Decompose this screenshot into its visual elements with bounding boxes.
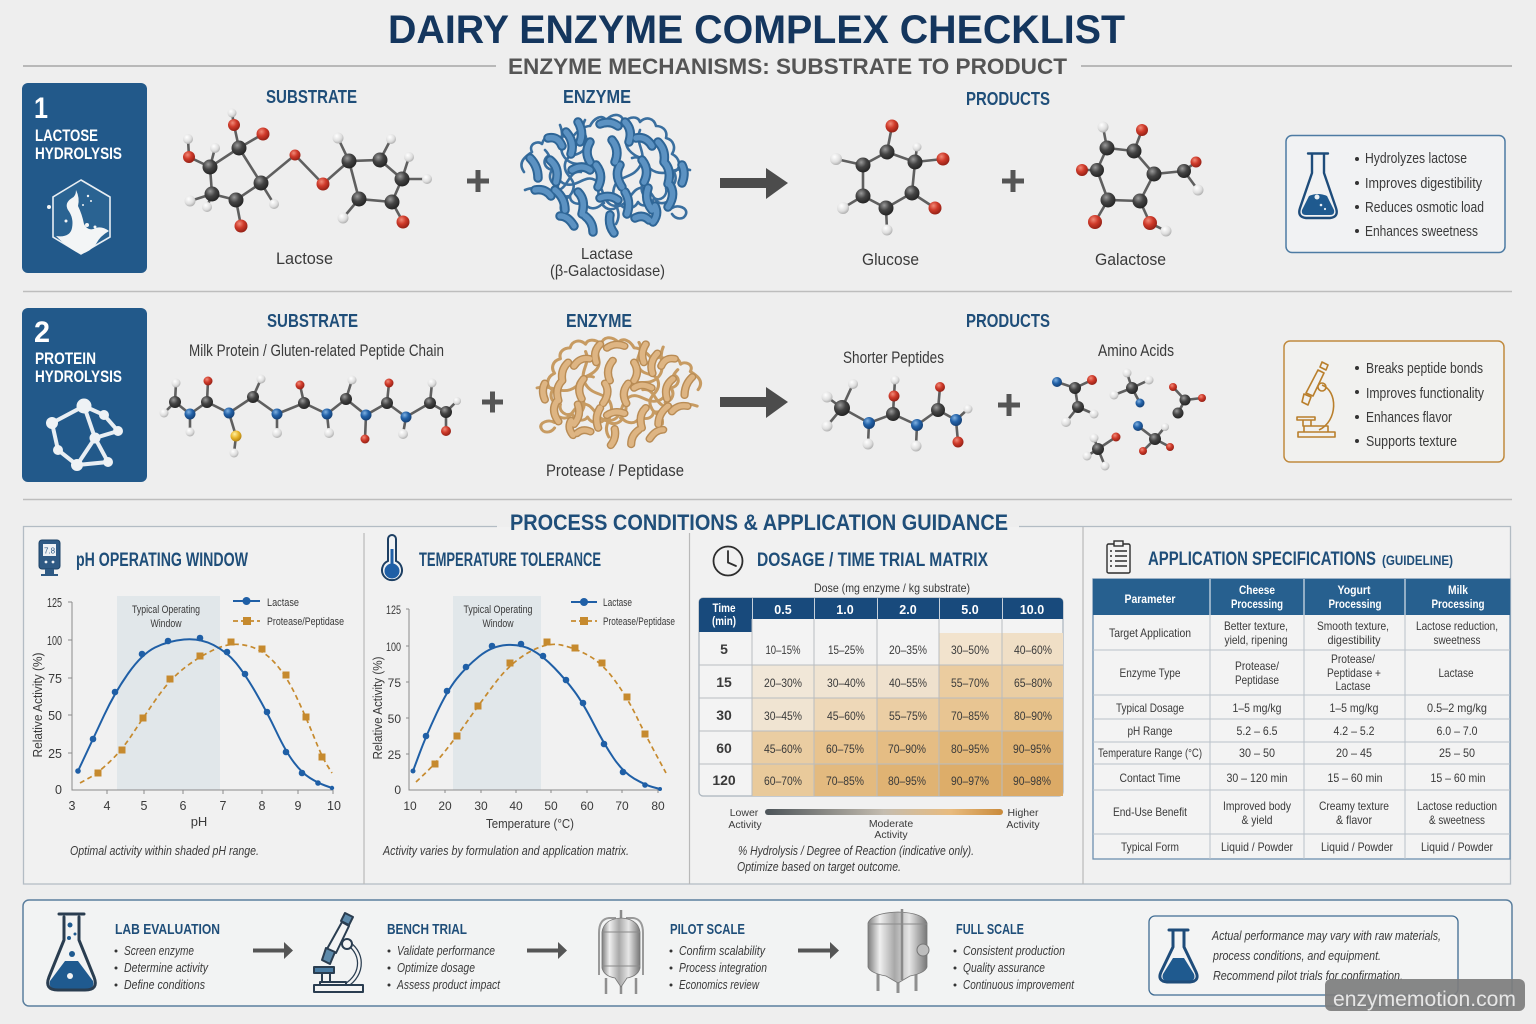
row: contact time: 15 – 60 min <box>1328 771 1382 785</box>
chart: pH activity <box>31 596 344 829</box>
icon: milk splash hexagon <box>47 180 110 254</box>
list: protease benefits: Breaks peptide bonds <box>1366 361 1483 377</box>
list: full scale: Quality assurance <box>963 961 1045 975</box>
header row: Milk <box>1448 583 1468 597</box>
badge: protein hydrolysis: PROTEIN <box>35 349 96 368</box>
panel frame: process conditions <box>24 526 1510 884</box>
legend: activity scale <box>728 807 1040 841</box>
chart: temperature activity <box>371 596 675 831</box>
label: enzyme: ENZYME <box>566 311 632 331</box>
row: enzyme type: Lactase <box>1438 666 1474 680</box>
header labels: 0.5 <box>774 603 792 617</box>
row: target application: yield, ripening <box>1224 633 1288 647</box>
row: 15 min: 20–30% <box>764 676 802 690</box>
heading: application specifications: (GUIDELINE) <box>1382 552 1453 568</box>
x axis labels: 80 <box>651 799 665 813</box>
step: pilot scale <box>599 910 767 994</box>
row: 60 min: 80–95% <box>951 742 989 756</box>
row: temperature range: Temperature Range (°C) <box>1098 746 1202 760</box>
label: galactose: Galactose <box>1095 250 1166 269</box>
header row: Yogurt <box>1338 583 1370 597</box>
arrow: bench to pilot <box>527 942 567 959</box>
row: 120 min: 90–97% <box>951 774 989 788</box>
x axis labels: 10 <box>327 799 341 813</box>
label: shorter peptides: Shorter Peptides <box>843 348 944 367</box>
shaded operating window <box>117 596 220 790</box>
heat cells <box>752 633 1063 796</box>
row: 120 min: 80–95% <box>888 774 926 788</box>
label: typical window: Typical Operating <box>132 604 200 616</box>
list: pilot scale: Confirm scalability <box>679 944 766 958</box>
icon: thermometer <box>382 535 402 580</box>
icon: clipboard <box>1107 541 1130 573</box>
series: protease <box>416 638 666 782</box>
icon: microscope outline <box>1297 362 1335 437</box>
list: lactase benefits: Hydrolyzes lactose <box>1365 151 1467 167</box>
row: 15 min: 15 <box>716 674 732 690</box>
molecule: shorter peptides <box>822 376 972 452</box>
label: glucose: Glucose <box>862 250 919 269</box>
y axis labels: 100 <box>386 640 401 654</box>
label: typical window: Typical Operating <box>464 604 532 616</box>
watermark <box>1325 979 1525 1011</box>
y axis labels: 50 <box>48 709 62 723</box>
row: typical dosage: 1–5 mg/kg <box>1330 701 1378 715</box>
row: 30 min: 45–60% <box>827 709 865 723</box>
text: disclaimer: Actual performance may vary with raw materials, <box>1211 928 1441 943</box>
title: DAIRY ENZYME COMPLEX CHECKLIST <box>388 8 1125 52</box>
row: 15 min: 30–40% <box>827 676 865 690</box>
row: target application <box>1109 619 1498 647</box>
row: temperature range: 30 – 50 <box>1239 746 1275 760</box>
row: typical form: Typical Form <box>1121 840 1179 854</box>
step: lab evaluation <box>48 914 220 992</box>
panel: dosage time matrix <box>699 546 1063 874</box>
icon: molecule network <box>46 398 123 471</box>
badge: protein hydrolysis: 2 <box>34 316 50 349</box>
axis title: pH: pH <box>191 814 207 829</box>
row: enzyme type: Protease/ <box>1331 652 1376 666</box>
row: 120 min <box>712 772 1051 788</box>
y axis labels <box>386 603 401 797</box>
row: 120 min: 120 <box>712 772 736 788</box>
label: lactase: (β-Galactosidase) <box>550 263 665 280</box>
series: lactase <box>410 641 662 791</box>
header row: Cheese <box>1239 583 1275 597</box>
list: pilot scale: Economics review <box>679 978 760 992</box>
row: target application: sweetness <box>1434 633 1480 647</box>
x axis labels: 20 <box>438 799 452 813</box>
row: end-use benefit: End-Use Benefit <box>1113 805 1188 819</box>
row: contact time: 15 – 60 min <box>1430 771 1486 785</box>
y axis labels: 25 <box>388 748 401 762</box>
row: end-use benefit: & sweetness <box>1429 813 1485 827</box>
table: dosage matrix <box>699 598 1063 796</box>
icon: flask <box>1299 154 1337 218</box>
x axis labels: 6 <box>180 799 187 813</box>
arrow: reaction <box>720 168 788 199</box>
header labels: 5.0 <box>961 603 979 617</box>
row: 5 min: 30–50% <box>951 643 989 657</box>
list: full scale: Continuous improvement <box>963 978 1074 992</box>
row: 30 min: 30 <box>716 707 732 723</box>
row: enzyme type: Peptidase <box>1235 673 1279 687</box>
legend: activity scale: Activity <box>874 829 908 841</box>
legend: Protease/Peptidase <box>267 616 344 628</box>
row: typical dosage: 1–5 mg/kg <box>1232 701 1282 715</box>
note: dosage <box>737 844 974 874</box>
y axis labels: 125 <box>47 596 62 610</box>
header labels: 10.0 <box>1020 603 1044 617</box>
badge: protein hydrolysis <box>22 308 147 482</box>
icon: pH meter <box>39 540 60 576</box>
row: 120 min: 60–70% <box>764 774 802 788</box>
row: 60 min: 60 <box>716 740 732 756</box>
row: 60 min: 45–60% <box>764 742 802 756</box>
row: target application: digestibility <box>1328 633 1380 647</box>
header row: Processing <box>1231 597 1283 611</box>
header cells <box>699 598 1063 632</box>
axis title: temperature: Temperature (°C) <box>486 816 574 831</box>
list: lab evaluation: Define conditions <box>124 978 205 992</box>
row: target application: Target Application <box>1109 626 1191 640</box>
badge: lactose hydrolysis: LACTOSE <box>35 126 98 145</box>
label: lactase <box>550 246 665 280</box>
legend: activity scale: Activity <box>1006 819 1040 831</box>
molecule: peptide chain <box>160 374 461 458</box>
list: pilot scale: Process integration <box>679 961 767 975</box>
row: target application: Better texture, <box>1224 619 1288 633</box>
row: 15 min: 55–70% <box>951 676 989 690</box>
axes <box>68 602 333 794</box>
row: end-use benefit <box>1113 799 1497 827</box>
x axis labels: 4 <box>104 799 111 813</box>
icon: pH meter: 7.8 <box>44 546 56 556</box>
label: products: PRODUCTS <box>966 89 1050 109</box>
list: protease benefits <box>1355 361 1485 450</box>
plus sign <box>1002 170 1024 192</box>
panel: protein hydrolysis <box>22 308 1504 482</box>
row: target application: Smooth texture, <box>1317 619 1389 633</box>
label: typical window <box>132 604 200 630</box>
list: bench trial: Optimize dosage <box>397 961 475 975</box>
row: 60 min: 60–75% <box>826 742 864 756</box>
row: 15 min: 65–80% <box>1014 676 1052 690</box>
label: typical window <box>464 604 532 630</box>
list: bench trial: Assess product impact <box>396 978 500 992</box>
y axis labels: 125 <box>386 603 401 617</box>
heading: temperature: TEMPERATURE TOLERANCE <box>419 550 601 571</box>
legend: activity scale: Moderate <box>869 818 913 830</box>
header row: Processing <box>1432 597 1484 611</box>
legend: Protease/Peptidase <box>603 616 675 628</box>
row: typical dosage <box>1116 701 1487 715</box>
icon: flask <box>1160 930 1197 982</box>
row: 15 min <box>716 674 1052 690</box>
row: 120 min: 90–98% <box>1013 774 1051 788</box>
molecules: amino acids <box>1052 368 1206 470</box>
panel: application specifications <box>1093 541 1510 859</box>
subtitle: enzyme mechanisms: ENZYME MECHANISMS: SUBSTRATE TO PRODUCT <box>508 54 1068 79</box>
header labels <box>712 601 1044 628</box>
list: bench trial: Validate performance <box>397 944 495 958</box>
row: 5 min: 5 <box>720 641 728 657</box>
x axis labels <box>403 799 665 813</box>
badge: lactose hydrolysis: HYDROLYSIS <box>35 144 122 163</box>
row: typical dosage: 0.5–2 mg/kg <box>1427 701 1487 715</box>
note: dosage: % Hydrolysis / Degree of Reaction (indicative only). <box>738 844 974 858</box>
row: 15 min: 40–55% <box>889 676 927 690</box>
icon: flask <box>48 914 95 990</box>
y axis labels: 0 <box>55 783 62 797</box>
heading: process conditions: PROCESS CONDITIONS & APPLICATION GUIDANCE <box>510 510 1008 535</box>
x axis labels: 7 <box>220 799 227 813</box>
note: temperature: Activity varies by formulation and application matrix. <box>382 844 629 858</box>
list: protease benefits: Improves functionality <box>1366 386 1485 402</box>
legend: Lactase <box>267 597 299 609</box>
series: protease <box>80 638 332 783</box>
y axis labels: 100 <box>47 634 62 648</box>
watermark: enzymemotion.com <box>1333 988 1516 1011</box>
y axis labels <box>47 596 62 797</box>
x axis labels: 9 <box>295 799 302 813</box>
label: amino acids: Amino Acids <box>1098 341 1174 360</box>
label: substrate name: Milk Protein / Gluten-related Peptide Chain <box>189 341 444 360</box>
label: products: PRODUCTS <box>966 311 1050 331</box>
row: target application: Lactose reduction, <box>1416 619 1498 633</box>
row: 5 min <box>720 641 1052 657</box>
list: full scale <box>954 944 1074 992</box>
legend: activity scale: Higher <box>1008 807 1039 819</box>
row: temperature range: 25 – 50 <box>1439 746 1475 760</box>
row: end-use benefit: & yield <box>1242 813 1272 827</box>
table: application specifications <box>1093 579 1510 859</box>
row: end-use benefit: & flavor <box>1336 813 1372 827</box>
row: enzyme type <box>1120 652 1474 693</box>
plus sign <box>467 170 489 192</box>
enzyme: lactase ribbon structure <box>521 115 690 233</box>
list: lactase benefits: Improves digestibility <box>1365 176 1483 192</box>
row: pH range: 6.0 – 7.0 <box>1436 724 1478 738</box>
arrow: lab to bench <box>253 942 293 959</box>
row: 60 min: 70–90% <box>888 742 926 756</box>
row: 120 min: 70–85% <box>826 774 864 788</box>
heading: full scale: FULL SCALE <box>956 921 1024 938</box>
heading: lab evaluation: LAB EVALUATION <box>115 921 220 938</box>
row: enzyme type: Enzyme Type <box>1120 666 1181 680</box>
list: protease benefits: Enhances flavor <box>1366 410 1452 426</box>
y axis labels: 75 <box>48 672 62 686</box>
x axis labels: 60 <box>580 799 594 813</box>
label: protease: Protease / Peptidase <box>546 461 684 480</box>
molecule: lactose <box>183 108 432 232</box>
row: enzyme type: Protease/ <box>1235 659 1280 673</box>
x axis labels: 30 <box>474 799 488 813</box>
row: 30 min: 80–90% <box>1014 709 1052 723</box>
x axis labels: 50 <box>544 799 558 813</box>
row: end-use benefit: Lactose reduction <box>1417 799 1497 813</box>
note: dosage: Optimize based on target outcome. <box>737 860 901 874</box>
row: 30 min: 30–45% <box>764 709 802 723</box>
plus sign <box>482 392 503 412</box>
row: typical form: Liquid / Powder <box>1321 840 1393 854</box>
row: 5 min: 15–25% <box>828 643 864 657</box>
row: temperature range <box>1098 746 1475 760</box>
list: lab evaluation: Determine activity <box>124 961 209 975</box>
y axis labels: 50 <box>388 712 401 726</box>
row: 5 min: 40–60% <box>1014 643 1052 657</box>
panel: scale-up pathway <box>23 900 1512 1006</box>
header labels: (min) <box>712 614 736 628</box>
icon: pilot vessel <box>599 910 643 994</box>
label: substrate: SUBSTRATE <box>266 87 357 107</box>
enzyme: protease ribbon structure <box>537 338 701 445</box>
heading: bench trial: BENCH TRIAL <box>387 921 467 938</box>
x axis labels: 3 <box>69 799 76 813</box>
label: lactase: Lactase <box>581 246 633 263</box>
x axis labels: 10 <box>403 799 417 813</box>
axis title: relative activity: Relative Activity (%) <box>371 656 385 760</box>
shaded operating window <box>453 596 541 790</box>
text: disclaimer <box>1211 928 1441 983</box>
legend: Lactase <box>603 597 632 609</box>
row: 30 min: 55–75% <box>889 709 927 723</box>
row: pH range: 4.2 – 5.2 <box>1334 724 1375 738</box>
text: disclaimer: Recommend pilot trials for confirmation. <box>1213 968 1403 983</box>
panel: lactose hydrolysis <box>22 83 1505 280</box>
icon: clock <box>714 546 742 576</box>
header labels: 2.0 <box>899 603 917 617</box>
header row: Parameter <box>1124 592 1176 606</box>
label: typical window: Window <box>482 618 514 630</box>
list: lactase benefits: Reduces osmotic load <box>1365 200 1484 216</box>
axes <box>406 609 661 793</box>
header row <box>1093 579 1510 615</box>
x axis labels: 40 <box>509 799 523 813</box>
heading: application specifications: APPLICATION SPECIFICATIONS <box>1148 549 1376 570</box>
row: typical form: Liquid / Powder <box>1221 840 1293 854</box>
row: end-use benefit: Improved body <box>1223 799 1291 813</box>
row: typical form: Liquid / Powder <box>1421 840 1493 854</box>
series: lactase <box>75 635 334 790</box>
list: protease benefits: Supports texture <box>1366 434 1457 450</box>
x axis labels: 8 <box>259 799 266 813</box>
icon: production tank <box>868 909 929 993</box>
molecule: galactose <box>1076 122 1204 236</box>
step: bench trial <box>314 913 500 992</box>
label: enzyme: ENZYME <box>563 87 631 107</box>
plus sign <box>998 394 1020 416</box>
heading: pilot scale: PILOT SCALE <box>670 921 745 938</box>
panel: pH operating window <box>31 540 344 858</box>
row: enzyme type: Peptidase + <box>1327 666 1381 680</box>
row: typical dosage: Typical Dosage <box>1116 701 1184 715</box>
label: lactose: Lactose <box>276 249 333 268</box>
row: 5 min: 20–35% <box>889 643 927 657</box>
arrow: pilot to full <box>798 942 839 959</box>
badge: lactose hydrolysis <box>22 83 147 273</box>
row: 5 min: 10–15% <box>766 643 801 657</box>
text: disclaimer: process conditions, and equipment. <box>1212 948 1381 963</box>
row: end-use benefit: Creamy texture <box>1319 799 1389 813</box>
callout: protease benefits <box>1284 341 1504 462</box>
label: typical window: Window <box>150 618 182 630</box>
callout: lactase benefits <box>1286 136 1505 252</box>
axis title: relative activity: Relative Activity (%) <box>31 652 45 758</box>
x axis labels: 70 <box>615 799 629 813</box>
list: lab evaluation: Screen enzyme <box>124 944 194 958</box>
note: pH: Optimal activity within shaded pH range. <box>70 844 259 858</box>
list: full scale: Consistent production <box>963 944 1065 958</box>
row: contact time <box>1120 771 1486 785</box>
x axis labels: 5 <box>141 799 148 813</box>
list: lab evaluation <box>114 944 209 992</box>
row: pH range <box>1128 724 1478 738</box>
panel: temperature tolerance <box>371 535 675 858</box>
heading: pH window: pH OPERATING WINDOW <box>76 550 248 571</box>
row: 30 min: 70–85% <box>951 709 989 723</box>
label: substrate: SUBSTRATE <box>267 311 358 331</box>
y axis labels: 75 <box>388 676 401 690</box>
row: 60 min: 90–95% <box>1013 742 1051 756</box>
row: enzyme type: Lactase <box>1336 679 1371 693</box>
heading: dosage matrix: DOSAGE / TIME TRIAL MATRIX <box>757 550 988 571</box>
list: bench trial <box>388 944 500 992</box>
list: pilot scale <box>670 944 767 992</box>
molecule: glucose <box>830 120 950 236</box>
legend <box>571 597 675 628</box>
callout: disclaimer <box>1149 916 1458 995</box>
row: pH range: pH Range <box>1128 724 1173 738</box>
badge: lactose hydrolysis: 1 <box>34 92 48 125</box>
badge: protein hydrolysis: HYDROLYSIS <box>35 367 122 386</box>
row: typical form <box>1121 840 1493 854</box>
label: dose units: Dose (mg enzyme / kg substrate) <box>814 581 970 595</box>
step: full scale <box>868 909 1074 993</box>
row: 30 min <box>716 707 1052 723</box>
arrow: reaction <box>720 387 788 418</box>
legend: activity scale: Activity <box>728 819 762 831</box>
row: contact time: Contact Time <box>1120 771 1181 785</box>
list: lactase benefits <box>1355 151 1484 240</box>
legend: activity scale: Lower <box>730 807 759 819</box>
y axis labels: 25 <box>48 747 62 761</box>
row: temperature range: 20 – 45 <box>1336 746 1372 760</box>
header labels: Time <box>712 601 736 615</box>
x axis labels <box>69 799 341 813</box>
header row: Processing <box>1328 597 1382 611</box>
y axis labels: 0 <box>394 783 401 797</box>
legend <box>233 597 344 628</box>
header labels: 1.0 <box>836 603 854 617</box>
list: lactase benefits: Enhances sweetness <box>1365 224 1478 240</box>
row: pH range: 5.2 – 6.5 <box>1236 724 1278 738</box>
icon: microscope <box>314 913 363 992</box>
row: contact time: 30 – 120 min <box>1226 771 1288 785</box>
row: 60 min <box>716 740 1051 756</box>
